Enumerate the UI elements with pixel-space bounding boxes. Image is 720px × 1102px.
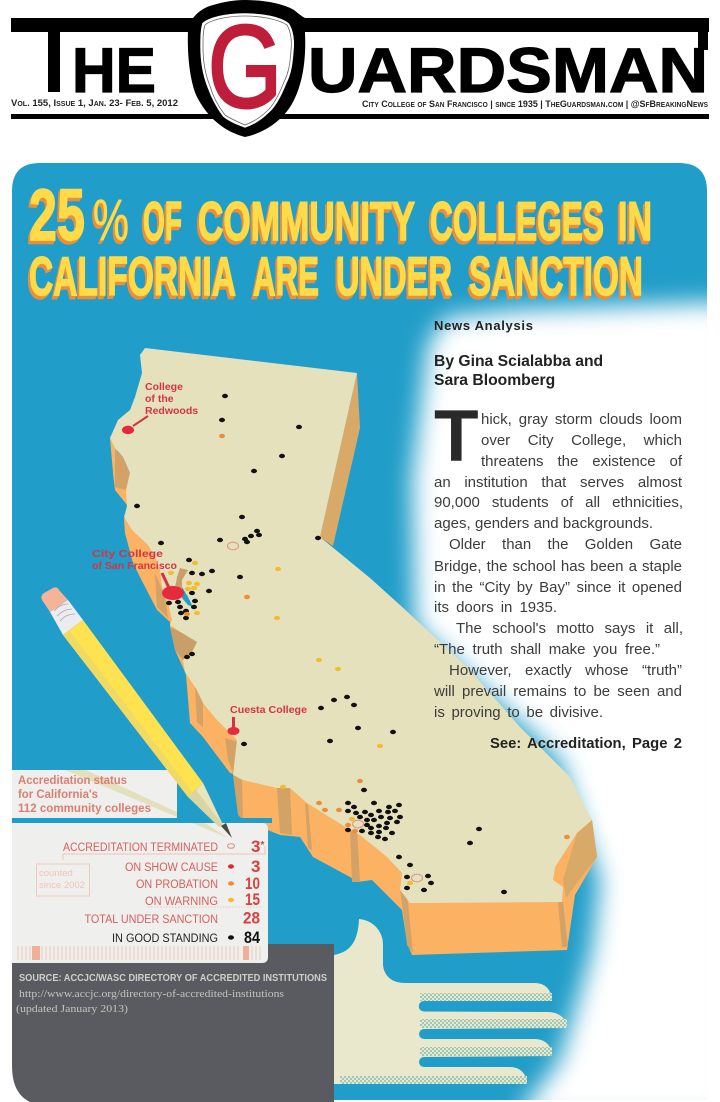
row: in good standing bbox=[112, 928, 260, 947]
row: accreditation terminated: ACCREDITATION TERMINATED bbox=[63, 842, 218, 854]
counted since 2002 note: counted bbox=[39, 868, 73, 879]
accreditation terminated rings bbox=[228, 542, 422, 882]
article paragraphs: over City College, which bbox=[481, 432, 682, 449]
article paragraphs: will prevail remains to be seen and bbox=[434, 683, 682, 700]
row: on probation: ON PROBATION bbox=[136, 879, 218, 891]
row: on probation: 10 bbox=[245, 874, 260, 893]
drop cap: T bbox=[434, 396, 479, 477]
title line 1 bbox=[29, 175, 652, 256]
illustration: hand bbox=[300, 919, 567, 1084]
row: total under sanction bbox=[84, 908, 260, 928]
marker: City College of San Francisco: City College bbox=[92, 548, 163, 560]
row: accreditation terminated bbox=[63, 837, 264, 856]
row: on show cause: 3 bbox=[251, 857, 260, 876]
row: total under sanction: TOTAL UNDER SANCTION bbox=[84, 914, 218, 926]
article paragraphs: The school's motto says it all, bbox=[456, 620, 683, 637]
masthead wordmark: HE bbox=[72, 36, 156, 106]
article paragraphs: an institution that serves almost bbox=[434, 474, 682, 491]
title line 2: UNDER bbox=[336, 245, 452, 307]
masthead wordmark bbox=[72, 36, 708, 106]
article paragraphs: However, exactly whose “truth” bbox=[449, 662, 682, 679]
map side: tan eastern wall bbox=[320, 373, 360, 546]
row: on show cause: ON SHOW CAUSE bbox=[125, 862, 218, 874]
icon: pencil bbox=[41, 587, 232, 838]
legend title box: for California's bbox=[18, 789, 98, 801]
title line 1: % bbox=[93, 188, 129, 253]
legend title box: 112 community colleges bbox=[18, 803, 151, 815]
marker: College of the Redwoods: Redwoods bbox=[145, 405, 198, 417]
marker: City College of San Francisco bbox=[92, 548, 184, 600]
legend: accreditation status table bbox=[12, 823, 268, 963]
map side: orange coast wall bbox=[110, 438, 597, 955]
row: on warning: 15 bbox=[245, 890, 260, 909]
article paragraphs: its doors in 1935. bbox=[434, 599, 557, 616]
white cloud behind article bbox=[412, 302, 720, 1102]
counted since 2002 note: since 2002 bbox=[39, 880, 85, 891]
map side: tan cliff bands bbox=[115, 449, 568, 953]
shield logo bbox=[188, 0, 305, 137]
article text bbox=[434, 318, 683, 752]
marker: Cuesta College: Cuesta College bbox=[230, 704, 307, 716]
title bbox=[29, 175, 652, 307]
title line 1: IN bbox=[618, 190, 652, 252]
article paragraphs: in the “City by Bay” since it opened bbox=[434, 579, 682, 596]
byline: By Gina Scialabba and bbox=[434, 353, 603, 370]
legend title box: Accreditation status bbox=[18, 775, 127, 787]
issue line: Vol. 155, Issue 1, Jan. 23- Feb. 5, 2012 bbox=[11, 98, 178, 109]
row: on warning: ON WARNING bbox=[145, 896, 218, 908]
masthead wordmark: UARDSMAN bbox=[308, 36, 708, 106]
panel: source credit bbox=[12, 944, 334, 1102]
article paragraphs: ages, genders and backgrounds. bbox=[434, 515, 653, 532]
marker: Cuesta College bbox=[228, 704, 307, 735]
row: in good standing: IN GOOD STANDING bbox=[112, 933, 218, 945]
marker: City College of San Francisco: of San Francisco bbox=[92, 560, 177, 572]
panel: source credit: http://www.accjc.org/directory-of-accredited-institutions bbox=[19, 989, 284, 1000]
college dots: black, in good standing bbox=[134, 394, 507, 894]
legend title box bbox=[12, 770, 272, 823]
title line 1: OF bbox=[143, 190, 182, 252]
letter G: G bbox=[208, 1, 282, 132]
title line 1: COMMUNITY bbox=[198, 190, 415, 252]
masthead bbox=[11, 0, 709, 137]
article paragraphs bbox=[434, 411, 683, 721]
San Francisco Bay bbox=[175, 568, 193, 607]
article paragraphs: hick, gray storm clouds loom bbox=[481, 411, 682, 428]
row: accreditation terminated: * bbox=[260, 840, 264, 851]
publication info line: City College of San Francisco | since 1935 | TheGuardsman.com | @SfBreakingNews bbox=[362, 99, 708, 110]
article paragraphs: Bridge, the school has been a staple bbox=[434, 558, 682, 575]
row: on warning bbox=[145, 890, 260, 909]
article paragraphs: 90,000 students of all ethnicities, bbox=[434, 494, 683, 511]
masthead rules bbox=[11, 18, 709, 119]
title line 2: ARE bbox=[253, 245, 319, 307]
title line 1: 25 bbox=[29, 175, 85, 256]
marker: College of the Redwoods: of the bbox=[145, 393, 174, 405]
row: on show cause bbox=[125, 857, 260, 876]
marker: College of the Redwoods bbox=[122, 381, 198, 434]
marker: College of the Redwoods: College bbox=[145, 381, 183, 393]
map top surface bbox=[110, 348, 592, 903]
row: total under sanction: 28 bbox=[243, 908, 260, 928]
Monterey bay bbox=[170, 627, 197, 660]
article paragraphs: “The truth shall make you free.” bbox=[434, 641, 660, 658]
row: accreditation terminated: 3 bbox=[251, 837, 260, 856]
byline bbox=[434, 353, 603, 389]
panel: source credit: (updated January 2013) bbox=[16, 1004, 129, 1015]
college dots: yellow, on warning bbox=[168, 561, 413, 885]
see also line: See: Accreditation, Page 2 bbox=[490, 736, 682, 752]
title line 2 bbox=[29, 245, 643, 307]
row: on probation bbox=[136, 874, 260, 893]
map side: tan south-east wall bbox=[563, 820, 597, 898]
college dots: orange, on probation bbox=[184, 434, 570, 839]
article paragraphs: Older than the Golden Gate bbox=[449, 536, 682, 553]
kicker: News Analysis bbox=[434, 318, 534, 333]
row: in good standing: 84 bbox=[244, 928, 260, 947]
article paragraphs: is proving to be divisive. bbox=[434, 704, 603, 721]
byline: Sara Bloomberg bbox=[434, 372, 555, 389]
panel: source credit: SOURCE: ACCJC/WASC DIRECTORY OF ACCREDITED INSTITUTIONS bbox=[19, 973, 327, 984]
article paragraphs: threatens the existence of bbox=[481, 453, 682, 470]
map of California bbox=[92, 348, 597, 955]
counted since 2002 note bbox=[36, 846, 265, 896]
title line 2: CALIFORNIA bbox=[29, 245, 236, 307]
